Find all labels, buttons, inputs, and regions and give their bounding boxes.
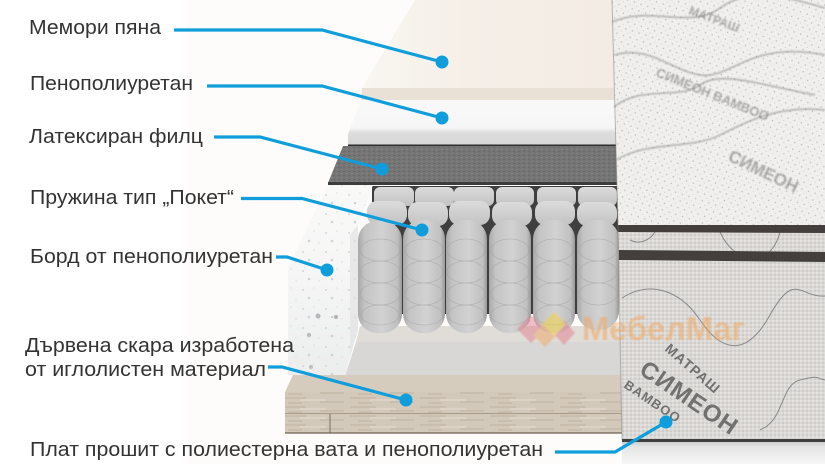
woven brand text: upper: МАТРАШ bbox=[687, 4, 742, 35]
leader: border foam bbox=[276, 257, 334, 276]
layer: pocket springs bbox=[358, 186, 619, 333]
quilting lines: lower panel bbox=[622, 232, 825, 430]
mattress: quilted fabric side bbox=[612, 0, 825, 442]
floor under mattress bbox=[622, 440, 825, 464]
spring row: front bbox=[358, 220, 619, 333]
woven brand text: lower: МАТРАШ bbox=[662, 340, 724, 397]
label: wooden slat line 1: Дървена скара изработена bbox=[25, 335, 295, 357]
label: wooden slat line 2: от иглолистен материал bbox=[25, 359, 266, 381]
leader: latex felt bbox=[214, 137, 388, 176]
labels bbox=[25, 17, 543, 461]
layer: polyurethane border bbox=[288, 185, 373, 375]
spring row: middle bbox=[367, 201, 617, 226]
leader: memory foam bbox=[174, 30, 448, 68]
spring coils bbox=[360, 239, 617, 325]
label: polyurethane foam: Пенополиуретан bbox=[30, 73, 193, 95]
layer: memory foam bbox=[361, 0, 614, 100]
label: memory foam: Мемори пяна bbox=[29, 17, 162, 39]
floor under springs bbox=[345, 326, 622, 376]
woven brand text: lower: СИМЕОН bbox=[635, 356, 743, 441]
woven brand text: upper bbox=[654, 4, 801, 197]
leader: wooden slat bbox=[268, 367, 412, 406]
spring row: back bbox=[374, 187, 617, 206]
leader: polyurethane foam bbox=[207, 86, 448, 124]
label: latex felt: Латексиран филц bbox=[29, 126, 203, 148]
layer: wooden slat bbox=[285, 375, 623, 433]
label: border foam: Борд от пенополиуретан bbox=[30, 246, 273, 268]
layer: latex felt bbox=[328, 144, 617, 185]
label: pocket spring: Пружина тип „Покет“ bbox=[30, 187, 234, 209]
woven brand text: upper: СИМЕОН bbox=[725, 147, 801, 197]
label: fabric: Плат прошит с полиестерна вата и пенополиуретан bbox=[30, 439, 543, 461]
woven brand text: upper: СИМЕОН BAMBOO bbox=[654, 65, 771, 124]
layer: polyurethane foam bbox=[348, 100, 616, 145]
dark trim bands bbox=[618, 225, 825, 262]
quilting lines bbox=[612, 0, 825, 160]
watermark: МебелМаг logo: МебелМаг bbox=[582, 310, 745, 347]
leader: pocket spring bbox=[241, 198, 428, 236]
leader: fabric bbox=[555, 416, 672, 452]
woven brand text: lower: BAMBOO bbox=[621, 377, 684, 426]
